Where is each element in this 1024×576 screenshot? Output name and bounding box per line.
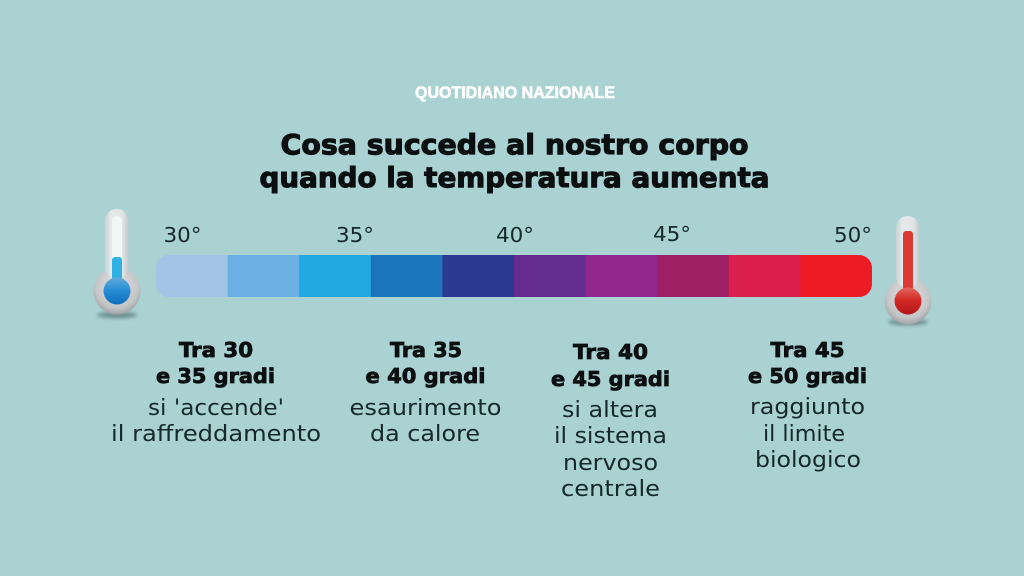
scale labels: 40° <box>496 223 534 247</box>
column: 45-50 <box>748 338 867 473</box>
column: 30-35: si 'accende' <box>148 396 284 421</box>
column: 45-50: il limite <box>763 422 845 447</box>
scale labels: 50° <box>834 223 872 247</box>
column: 40-45: nervoso <box>563 451 658 476</box>
scale labels <box>164 222 872 247</box>
icon: cold thermometer <box>94 209 140 318</box>
column: 35-40: da calore <box>370 422 480 447</box>
column: 45-50: biologico <box>755 448 861 473</box>
column: 30-35: e 35 gradi <box>156 364 275 388</box>
column: 45-50: e 50 gradi <box>748 364 867 388</box>
title: Cosa succede al nostro corpo <box>280 128 748 161</box>
column: 30-35: il raffreddamento <box>111 422 321 447</box>
column: 35-40: e 40 gradi <box>366 364 486 388</box>
icon: hot thermometer <box>884 216 932 326</box>
column: 40-45: Tra 40 <box>573 340 648 364</box>
column: 40-45: e 45 gradi <box>551 367 670 391</box>
column: 35-40: esaurimento <box>350 396 502 421</box>
title: quando la temperatura aumenta <box>260 161 770 194</box>
column: 45-50: Tra 45 <box>770 338 844 362</box>
column: 40-45: centrale <box>561 477 660 502</box>
column: 40-45 <box>551 340 670 502</box>
column: 30-35: Tra 30 <box>179 338 253 362</box>
column: 40-45: il sistema <box>554 424 667 449</box>
column: 40-45: si altera <box>562 398 658 423</box>
infographic <box>94 86 932 496</box>
brand label: QUOTIDIANO NAZIONALE <box>415 83 615 102</box>
column: 30-35 <box>111 338 321 447</box>
scale labels: 45° <box>653 222 691 246</box>
column: 35-40 <box>350 338 502 447</box>
title <box>260 128 770 194</box>
column: 45-50: raggiunto <box>750 395 865 420</box>
column: 35-40: Tra 35 <box>390 338 462 362</box>
scale labels: 35° <box>336 223 374 247</box>
temperature colour bar <box>156 255 872 297</box>
scale labels: 30° <box>164 223 202 247</box>
